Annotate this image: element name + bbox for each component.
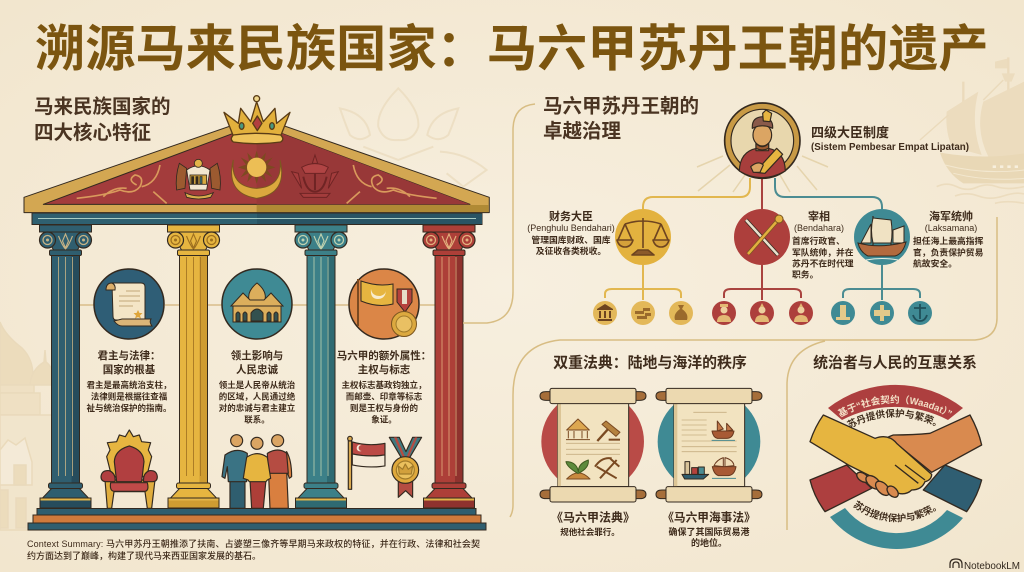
text: territory and loyalty: 领土是人民帝从统治 — [219, 380, 296, 390]
text: territory and loyalty: 的区域，人民通过绝 — [219, 392, 296, 402]
heading: territory and loyalty — [231, 349, 283, 376]
arc band: teal — [830, 508, 963, 549]
icon: three people — [222, 435, 292, 508]
icon: royal crown — [224, 96, 290, 144]
curved text: sultan provides: 苏丹提供保护与繁荣。 — [846, 408, 936, 428]
icon: sultan portrait — [725, 103, 800, 178]
text: Malacca laws — [551, 510, 635, 537]
heading: four core characteristics — [34, 95, 171, 144]
icon: Brunei crest — [292, 155, 338, 197]
text: ruler and law: 君主是最高统治支柱， — [86, 380, 172, 390]
text: Malacca maritime law: 《马六甲海事法》 — [662, 510, 756, 524]
panel: reciprocal relationship — [809, 354, 982, 549]
icon: flag and medal — [349, 269, 419, 339]
text: admiral: 航故安全。 — [913, 258, 957, 268]
text: admiral — [913, 209, 984, 268]
text: admiral: 海军统帅 — [929, 209, 973, 223]
heading: governance: 卓越治理 — [543, 120, 621, 142]
text: chief minister: (Bendahara) — [794, 223, 844, 233]
label: four-tier ministers — [811, 125, 969, 153]
watermark: sailing ship — [920, 57, 1024, 203]
text: chief minister — [792, 209, 854, 280]
icon: scroll — [94, 269, 164, 339]
text: context summary — [27, 538, 480, 561]
heading: territory and loyalty: 领土影响与 — [231, 349, 283, 362]
pillar 3: sovereignty and symbols — [337, 269, 431, 497]
logo: NotebookLM: NotebookLM — [964, 561, 1020, 572]
icon: scales — [615, 209, 671, 265]
heading: territory and loyalty: 人民忠诚 — [236, 363, 278, 376]
curved text: sultan provides lower: 苏丹提供保护与繁荣。 — [853, 500, 936, 522]
text: Malacca maritime law: 确保了其国际贸易港 — [668, 526, 750, 537]
icon: sun and crescent — [232, 151, 282, 198]
text: ruler and law — [86, 380, 172, 413]
text: sovereignty and symbols: 而邮壶、印章等标志 — [346, 392, 423, 402]
panel: governance frame lines — [463, 104, 997, 530]
text: admiral: (Laksamana) — [925, 223, 977, 233]
icons: admiral sub-officers — [831, 301, 932, 325]
icon: national flag and medal — [348, 436, 422, 497]
logo: NotebookLM — [950, 559, 1020, 572]
text: ruler and law: 法律则是根据往查福 — [91, 392, 168, 402]
heading: reciprocal relationship: 统治者与人民的互惠关系 — [813, 354, 977, 372]
heading: sovereignty and symbols — [337, 349, 431, 376]
text: treasurer: 管理国库财政、国库 — [531, 234, 611, 245]
text: treasurer: 及征收各类税收。 — [536, 245, 606, 256]
pillar 1: ruler and law — [86, 269, 172, 508]
heading: ruler and law: 君主与法律： — [98, 349, 160, 362]
entablature beam — [32, 213, 482, 224]
label: four-tier ministers: 四级大臣制度 — [811, 125, 889, 140]
text: treasurer: 财务大臣 — [549, 209, 593, 223]
text: Malacca maritime law — [662, 510, 756, 548]
text: treasurer — [527, 209, 615, 256]
panel: superior governance — [527, 96, 984, 325]
text: ruler and law: 祉与统治保护的指南。 — [86, 403, 172, 413]
pediment roof — [24, 125, 489, 213]
pillar 2: territory and loyalty — [219, 269, 296, 508]
arc band: red — [828, 385, 963, 420]
text: Malacca laws: 《马六甲法典》 — [551, 510, 635, 524]
heading: ruler and law — [98, 349, 160, 376]
text: territory and loyalty: 联系。 — [244, 414, 270, 424]
heading: dual legal codes: 双重法典：陆地与海洋的秩序 — [553, 354, 747, 372]
curved text: social contract: 基于“社会契约（Waadat）” — [838, 394, 952, 418]
title: 溯源马来民族国家：马六甲苏丹王朝的遗产 — [35, 21, 989, 77]
panel: dual legal codes — [540, 354, 762, 548]
text: sovereignty and symbols: 主权标志基政钧独立， — [341, 380, 427, 390]
icon: palace — [222, 269, 292, 339]
text: territory and loyalty — [219, 380, 296, 424]
panel: four core characteristics temple — [24, 95, 489, 530]
temple steps — [28, 508, 486, 530]
heading: four core characteristics: 四大核心特征 — [34, 121, 151, 144]
text: sovereignty and symbols: 象证。 — [371, 414, 397, 424]
heading: governance — [543, 96, 699, 142]
heading: governance: 马六甲苏丹王朝的 — [543, 96, 699, 118]
text: admiral: 官，负责保护贸易 — [913, 246, 984, 258]
text: chief minister: 苏丹不在时代理 — [792, 258, 854, 268]
text: chief minister: 首席行政官、 — [792, 235, 845, 246]
text: chief minister: 军队统帅，并在 — [792, 246, 854, 258]
text: Malacca maritime law: 的地位。 — [691, 537, 727, 548]
text: context summary: 约方面达到了巅峰，构建了现代马来西亚国家发展的基石。 — [27, 550, 261, 561]
watermark: palace at lower left — [0, 322, 56, 530]
node: chief minister — [734, 209, 854, 280]
icon: ship — [854, 209, 910, 265]
text: territory and loyalty: 对的忠诚与君主建立 — [219, 403, 296, 413]
watermark: ornament behind pediment — [340, 88, 487, 187]
heading: sovereignty and symbols: 马六甲的额外属性： — [337, 349, 431, 362]
text: sovereignty and symbols: 则是王权与身份的 — [350, 403, 418, 413]
text: context summary: Context Summary: 马六甲苏丹王朝推添了扶南、占婆塑三像齐等早期马来政权的特征，并在行政、法律和社会契 — [27, 538, 480, 549]
icon: throne — [101, 430, 157, 508]
illustration: Malacca laws scroll — [540, 388, 646, 502]
icon: Malaysian coat of arms — [176, 159, 220, 199]
heading: sovereignty and symbols: 主权与标志 — [358, 363, 411, 376]
text: admiral: 担任海上最高指挥 — [913, 235, 984, 246]
text: sovereignty and symbols — [341, 380, 427, 424]
icons: treasury sub-officers — [593, 301, 693, 325]
icons: chief minister sub-officers — [712, 301, 813, 325]
node: treasurer — [527, 209, 671, 265]
label: four-tier ministers: (Sistem Pembesar Empat Lipatan) — [811, 142, 969, 153]
hierarchy connectors — [605, 156, 920, 300]
text: treasurer: (Penghulu Bendahari) — [527, 223, 615, 233]
illustration: Malacca maritime law scroll — [656, 388, 762, 502]
text: Malacca laws: 规他社会罪行。 — [560, 527, 620, 537]
icon: crossed sword and mace — [734, 209, 790, 265]
node: admiral — [854, 209, 984, 268]
heading: ruler and law: 国家的根基 — [103, 363, 156, 376]
text: chief minister: 职务。 — [792, 268, 818, 280]
text: chief minister: 宰相 — [808, 209, 830, 223]
heading: four core characteristics: 马来民族国家的 — [34, 95, 171, 118]
illustration: handshake — [810, 415, 982, 512]
temple columns — [40, 225, 475, 508]
